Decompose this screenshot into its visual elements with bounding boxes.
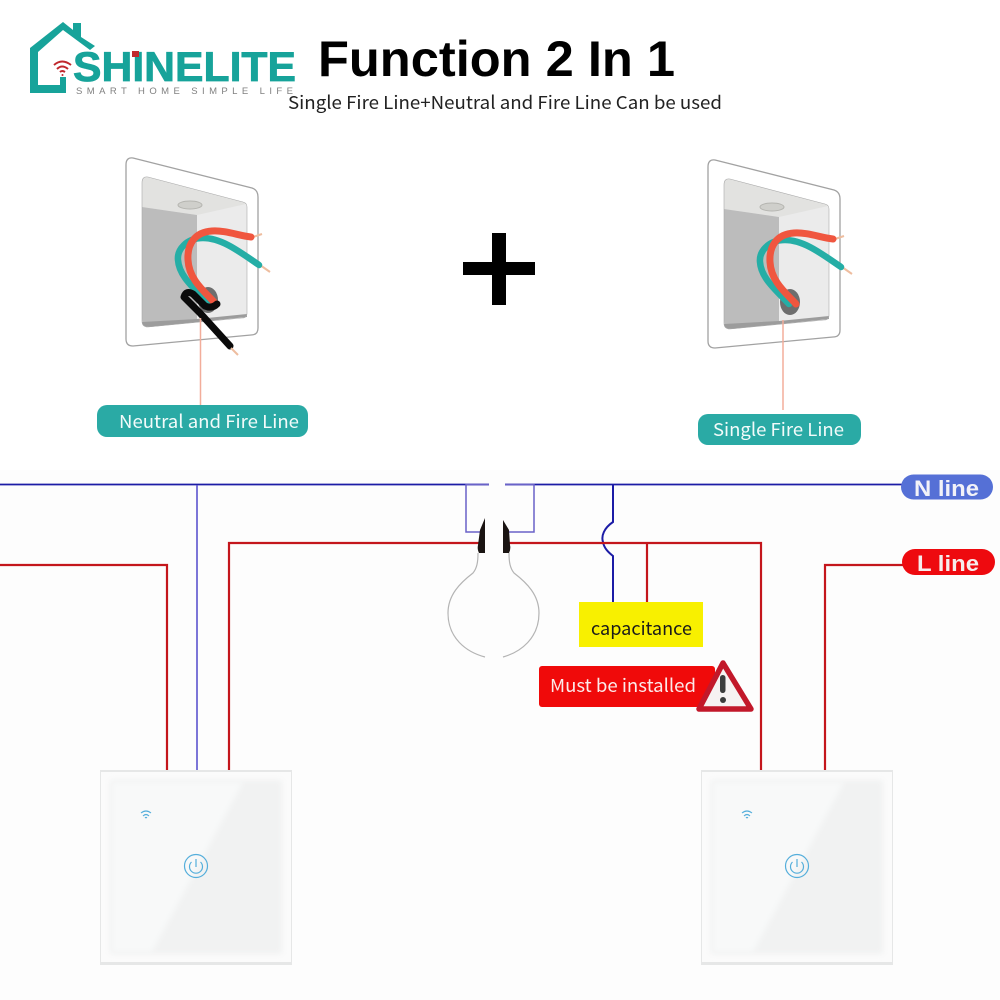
switch: left: [100, 770, 292, 965]
bulb cap right: [503, 520, 510, 553]
icon: power button: [184, 854, 208, 878]
right L wire: [825, 565, 905, 770]
logo wordmark: SHINELITE: [73, 43, 296, 90]
icon: warning triangle: [699, 663, 751, 709]
icon: house outline: [30, 22, 95, 93]
capacitor L wire: [646, 543, 648, 602]
title: Function 2 In 1: [318, 31, 675, 87]
icon: wifi: [141, 811, 151, 818]
lamp neutral loop: [466, 484, 534, 532]
icon: light bulb: [448, 518, 539, 657]
left feed L wire: [0, 565, 167, 770]
logo: Shinelite: [30, 22, 296, 97]
logo red dot: [132, 51, 139, 57]
subtitle: Single Fire Line+Neutral and Fire Line Can be used: [288, 89, 722, 115]
left switch neutral drop: [196, 485, 198, 770]
label pill: [698, 414, 861, 445]
N line wire: [0, 484, 905, 486]
black neutral wire: [184, 293, 230, 346]
L line label: L line: [917, 551, 979, 576]
diagram background: [0, 470, 1000, 1000]
capacitor neutral with hop: [602, 485, 613, 602]
leader line: [782, 320, 784, 410]
logo tagline: SMART HOME SIMPLE LIFE: [76, 86, 293, 97]
L line label: [902, 549, 995, 576]
callout: must be installed: [539, 663, 751, 709]
label text: Neutral and Fire Line: [119, 408, 299, 434]
icon: wifi: [742, 811, 752, 818]
label text: Single Fire Line: [713, 416, 844, 442]
capacitance box: capacitance: [591, 615, 692, 641]
label pill: [97, 405, 308, 437]
switch: right: [701, 770, 893, 965]
callout: must be installed: Must be installed: [550, 672, 696, 698]
bulb cap left: [478, 518, 485, 553]
N line label: [901, 474, 993, 501]
panel: neutral and fire line box: [97, 158, 308, 437]
wiring diagram: [0, 484, 905, 770]
bulb glass: [448, 553, 539, 657]
icon: red wifi: [54, 62, 71, 76]
leader line: [200, 318, 202, 405]
lamp L wire: [229, 543, 761, 770]
icon: plus sign: [463, 233, 535, 305]
capacitance box: [579, 602, 703, 647]
N line label: N line: [914, 476, 979, 501]
panel: single fire line box: [698, 160, 861, 445]
icon: power button: [786, 854, 808, 878]
